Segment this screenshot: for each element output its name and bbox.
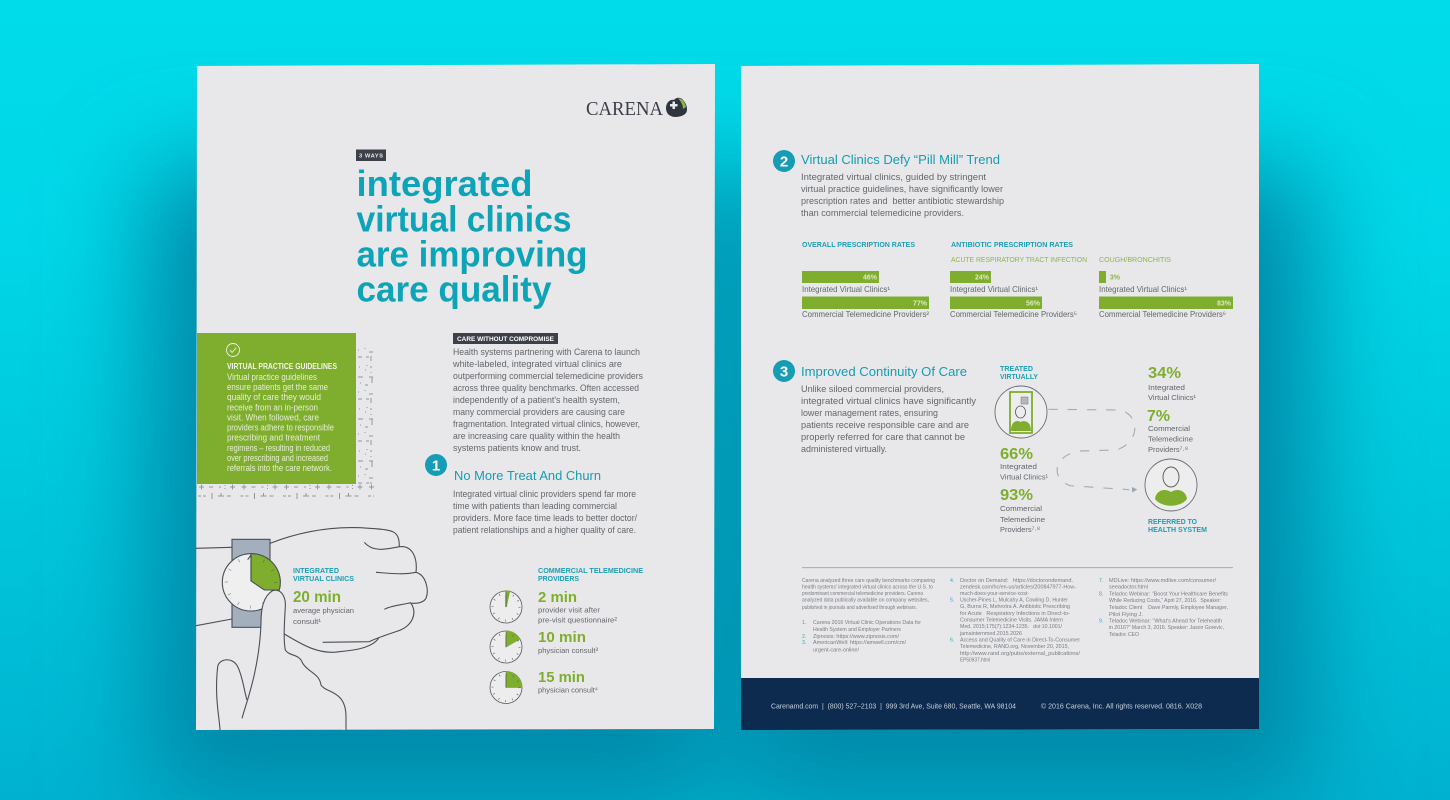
label: integrated virtual clinics xyxy=(293,568,354,583)
section 3 text: lower management rates, ensuring xyxy=(801,408,938,418)
illustration: hand with wristwatch xyxy=(196,528,427,730)
heading: continuity of care: Improved Continuity Of Care xyxy=(801,364,967,379)
section 3 text xyxy=(801,384,976,454)
section 1 text xyxy=(453,489,637,535)
heading: pill mill: Virtual Clinics Defy “Pill Mill” Trend xyxy=(801,152,1000,167)
chart heading: overall: OVERALL PRESCRIPTION RATES xyxy=(802,242,915,249)
section 1 text: time with patients than leading commercial xyxy=(453,501,617,511)
footnotes column 1: predominant commercial telemedicine providers. Carena xyxy=(802,591,923,597)
tag: care without compromise: CARE WITHOUT COMPROMISE xyxy=(457,336,555,343)
tag: 3 ways: 3 WAYS xyxy=(359,154,383,160)
footer copyright text: © 2016 Carena, Inc. All rights reserved. 0816. X028 xyxy=(1041,702,1202,710)
intro text: white-labeled, integrated virtual clinics are xyxy=(452,359,622,369)
footnotes column 2: Doctor on Demand: https://doctorondemand. xyxy=(960,578,1073,584)
section 2 text: than commercial telemedicine providers. xyxy=(801,208,964,218)
label: referred to health system: HEALTH SYSTEM xyxy=(1148,527,1207,534)
bar chart: acute respiratory tract infection: Integrated Virtual Clinics¹ xyxy=(950,284,1038,294)
number badge 1 xyxy=(425,454,447,476)
number badge 3: 3 xyxy=(780,364,788,380)
stat: 7 percent: Commercial xyxy=(1148,424,1190,433)
bar chart: acute respiratory tract infection: 56% xyxy=(1026,300,1041,308)
bar chart: acute respiratory tract infection: 24% xyxy=(975,274,990,282)
stat: 34 percent: Integrated xyxy=(1148,383,1185,392)
stat: 2 min: 2 min xyxy=(538,589,577,606)
footnotes column 1: Zipnosis: https://www.zipnosis.com/ xyxy=(813,634,900,640)
footnotes column 1: urgent-care-online/ xyxy=(813,648,860,654)
callout text: receive from an in-person xyxy=(227,402,318,412)
label: commercial telemedicine providers: PROVIDERS xyxy=(538,576,579,583)
icon: clock 10 min xyxy=(490,631,522,663)
stat: 10 min xyxy=(538,629,598,655)
label: treated virtually: TREATED xyxy=(1000,366,1033,373)
label: treated virtually: VIRTUALLY xyxy=(1000,374,1038,381)
footnotes column 3: While Reducing Costs,” April 27, 2016. Speaker: xyxy=(1109,598,1221,604)
callout text: prescribing and treatment xyxy=(227,433,320,443)
stat: 2 min: provider visit after xyxy=(538,606,600,614)
footnotes column 2: Consumer Telemedicine Visits. JAMA Intern xyxy=(960,618,1063,624)
footnotes column 3: MDLive: https://www.mdlive.com/consumer/ xyxy=(1109,578,1217,584)
stat: 66 percent: Virtual Clinics¹ xyxy=(1000,472,1048,482)
stat: 34 percent: Virtual Clinics¹ xyxy=(1148,393,1196,402)
footer contact text: Carenamd.com | (800) 527–2103 | 999 3rd Ave, Suite 680, Seattle, WA 98104 xyxy=(771,702,1016,710)
label: referred to health system: REFERRED TO xyxy=(1148,519,1198,526)
footnotes column 2: Telemedicine, RAND.org, November 20, 2015, xyxy=(960,644,1069,650)
intro text: fragmentation. Integrated virtual clinics, however, xyxy=(453,419,640,429)
footnotes column 2: for Acute Respiratory Infections in Direct-to- xyxy=(960,611,1070,617)
stat: 93 percent: Telemedicine xyxy=(1000,515,1045,524)
footnotes column 2: 5. xyxy=(950,598,954,604)
stat: 10 min: physician consult³ xyxy=(538,646,598,655)
section 1 text: Integrated virtual clinic providers spend far more xyxy=(453,489,636,499)
stat: 7 percent: Telemedicine xyxy=(1148,434,1193,444)
section 2 text: prescription rates and better antibiotic stewardship xyxy=(801,196,1004,206)
section 2 text: virtual practice guidelines, have significantly lower xyxy=(801,184,1003,194)
panel: left page xyxy=(196,64,715,730)
label: commercial telemedicine providers: COMMERCIAL TELEMEDICINE xyxy=(538,568,643,575)
callout text: referrals into the care network. xyxy=(227,463,332,473)
bar chart: cough and bronchitis: 83% xyxy=(1217,300,1232,308)
footnotes column 2: jamainternmed.2015.2026 xyxy=(959,631,1022,637)
callout text: ensure patients get the same xyxy=(227,382,328,392)
bar chart: overall prescription rates xyxy=(802,271,929,319)
footer bar xyxy=(741,678,1259,730)
footnotes column 1 xyxy=(802,578,935,654)
footnotes column 3: in 2016?” March 3, 2016. Speaker: Jason Gorevic, xyxy=(1109,625,1224,631)
footnotes column 2 xyxy=(950,578,1081,664)
stat: 20 min: 20 min xyxy=(293,589,341,606)
callout: virtual practice guidelines xyxy=(197,333,356,484)
title: virtual clinics xyxy=(356,198,572,240)
label: referred to health system xyxy=(1148,519,1207,534)
panel: right page xyxy=(741,64,1259,730)
callout text: providers adhere to responsible xyxy=(227,423,334,433)
intro text: systems patients know and trust. xyxy=(453,443,581,453)
stat: 34 percent: 34% xyxy=(1148,365,1181,382)
stat: 66 percent xyxy=(1000,446,1048,482)
bar chart: cough and bronchitis: Commercial Telemedicine Providers⁶ xyxy=(1099,309,1226,319)
stat: 15 min: physician consult⁴ xyxy=(538,686,598,694)
footnotes column 3: Teladoc Webinar: “What's Ahead for Telehealth xyxy=(1109,619,1222,625)
title: are improving xyxy=(356,234,588,274)
stat: 20 min xyxy=(293,589,354,626)
intro text: outperforming commercial telemedicine providers xyxy=(453,371,643,381)
bar chart: cough and bronchitis xyxy=(1099,271,1233,319)
icon: phone with doctor xyxy=(995,386,1047,438)
intro text: many commercial providers are causing care xyxy=(453,407,625,417)
icon: check circle xyxy=(226,344,240,356)
callout heading: VIRTUAL PRACTICE GUIDELINES xyxy=(227,362,337,371)
footnotes column 2: EP50937.html xyxy=(960,658,990,664)
footnotes column 3: Teladoc Client Dave Parmly, Employee Manager, xyxy=(1109,605,1228,611)
footnotes column 3: Teladoc CEO xyxy=(1109,632,1139,638)
bar chart: cough and bronchitis: Integrated Virtual Clinics¹ xyxy=(1099,284,1187,294)
stat: 15 min: 15 min xyxy=(538,669,585,686)
section 2 text: Integrated virtual clinics, guided by stringent xyxy=(801,172,986,182)
footnotes column 2: http://www.rand.org/pubs/external_publications/ xyxy=(960,651,1081,657)
stat: 66 percent: Integrated xyxy=(1000,462,1037,471)
number badge 1: 1 xyxy=(432,458,440,474)
bar chart: overall prescription rates: 77% xyxy=(913,300,928,308)
icon: doctor in circle xyxy=(1145,459,1197,511)
callout text: visit. When followed, care xyxy=(227,412,319,422)
footnotes column 1: 1. xyxy=(802,620,806,626)
bar chart: overall prescription rates: 46% xyxy=(863,274,878,282)
footnotes column 2: zendesk.com/hc/en-us/articles/200847977-How- xyxy=(960,584,1076,590)
footnotes column 3: Pilot Flying J. xyxy=(1109,612,1143,618)
icon: clock 15 min xyxy=(490,672,522,704)
footnotes column 1: health systems' integrated virtual clinics across the U.S. to xyxy=(802,584,933,590)
stat: 93 percent: 93% xyxy=(1000,487,1033,504)
icon: clock 2 min xyxy=(490,591,522,623)
section 3 text: patients receive responsible care and are xyxy=(801,420,969,430)
footnotes column 1: Carena 2016 Virtual Clinic Operations Data for xyxy=(813,620,921,626)
label: treated virtually xyxy=(1000,366,1038,381)
intro text: independently of a patient's health system, xyxy=(453,395,620,405)
footnotes column 3: 8. xyxy=(1099,592,1103,598)
stat: 66 percent: 66% xyxy=(1000,446,1033,463)
callout text: quality of care they would xyxy=(227,392,321,402)
decorative dot pattern xyxy=(197,345,374,500)
chart subheading: cough: COUGH/BRONCHITIS xyxy=(1099,257,1171,264)
bar chart: overall prescription rates: Integrated Virtual Clinics¹ xyxy=(802,284,890,294)
footnotes column 3 xyxy=(1099,578,1228,638)
arrow: dashed path to health system xyxy=(1048,409,1137,492)
footnotes column 2: Access and Quality of Care in Direct-To-Consumer xyxy=(960,638,1080,644)
intro text: are increasing care quality within the health xyxy=(453,431,620,441)
stat: 7 percent xyxy=(1147,408,1193,454)
footnotes column 3: Teladoc Webinar: “Boost Your Healthcare Benefits xyxy=(1109,592,1228,598)
footnotes column 2: 6. xyxy=(950,638,954,644)
heading: no more treat and churn: No More Treat And Churn xyxy=(454,468,601,483)
stat: 93 percent xyxy=(1000,487,1045,534)
footnotes column 1: 3. xyxy=(802,640,806,646)
callout text: over prescribing and increased xyxy=(227,453,328,463)
page shadows xyxy=(150,170,1310,800)
footnotes column 1: analyzed data publically available on company websites, xyxy=(802,598,929,604)
footnotes column 2: 4. xyxy=(950,578,954,584)
stat: 7 percent: Providers⁷·⁸ xyxy=(1148,445,1188,454)
footnotes column 1: Health System and Employer Partners xyxy=(813,627,901,633)
intro text: across three quality benchmarks. Often accessed xyxy=(453,383,639,393)
callout text: Virtual practice guidelines xyxy=(227,372,317,382)
footnotes column 1: AmericanWell: https://amwell.com/cm/ xyxy=(813,640,907,646)
label: commercial telemedicine providers xyxy=(538,568,643,583)
footnotes column 1: Carena analyzed three care quality benchmarks comparing xyxy=(802,578,935,584)
stat: 2 min xyxy=(538,589,617,624)
footnotes column 2: Uscher-Pines L, Mulcahy A, Cowling D, Hunter xyxy=(960,598,1068,604)
label: integrated virtual clinics: VIRTUAL CLINICS xyxy=(293,576,354,583)
number badge 3 xyxy=(773,360,795,382)
section 3 text: Unlike siloed commercial providers, xyxy=(801,384,944,394)
intro text: Health systems partnering with Carena to launch xyxy=(453,347,640,357)
tag: 3 ways xyxy=(356,150,386,161)
stat: 34 percent xyxy=(1148,365,1196,402)
footnotes column 2: much-does-your-service-cost- xyxy=(960,591,1029,597)
section 3 text: administered virtually. xyxy=(801,444,887,454)
logo: Carena: CARENA xyxy=(586,98,663,120)
footnotes column 3: 7. xyxy=(1099,578,1103,584)
stat: 10 min: 10 min xyxy=(538,629,586,646)
chart subheading: acute respiratory: ACUTE RESPIRATORY TRACT INFECTION xyxy=(951,257,1087,264)
title: integrated xyxy=(356,163,532,204)
title: care quality xyxy=(356,268,552,310)
section 1 text: patient relationships and a higher quality of care. xyxy=(453,525,636,535)
stat: 7 percent: 7% xyxy=(1147,408,1170,425)
section 3 text: properly referred for care that cannot be xyxy=(801,432,965,442)
bar chart: acute respiratory tract infection xyxy=(950,271,1077,319)
section 3 text: integrated virtual clinics have significantly xyxy=(801,396,976,406)
stat: 93 percent: Providers⁷·⁸ xyxy=(1000,525,1040,534)
section 2 text xyxy=(801,172,1004,218)
stat: 20 min: consult¹ xyxy=(293,617,321,626)
footnotes column 3: seeadoctor.html xyxy=(1109,585,1148,591)
label: integrated virtual clinics: INTEGRATED xyxy=(293,568,339,575)
number badge 2: 2 xyxy=(780,154,788,170)
stat: 15 min xyxy=(538,669,598,694)
stat: 2 min: pre-visit questionnaire² xyxy=(538,616,617,624)
bar chart: acute respiratory tract infection: Commercial Telemedicine Providers⁵ xyxy=(950,309,1077,319)
number badge 2 xyxy=(773,150,795,172)
callout text xyxy=(227,372,334,473)
bar chart: overall prescription rates: Commercial Telemedicine Providers² xyxy=(802,309,929,319)
footnotes column 1: published in journals and advertised through webinars. xyxy=(802,605,917,611)
tag: care without compromise xyxy=(453,333,558,344)
stat: 20 min: average physician xyxy=(293,606,354,615)
footnotes column 2: G, Burns R, Mehrotra A. Antibiotic Prescribing xyxy=(960,604,1070,610)
intro text xyxy=(452,347,643,453)
stat: 93 percent: Commercial xyxy=(1000,504,1042,513)
footnotes column 3: 9. xyxy=(1099,619,1103,625)
footnotes column 2: Med. 2015;175(7):1234-1235. doi:10.1001/ xyxy=(960,624,1063,630)
callout text: regimens – resulting in reduced xyxy=(227,443,330,453)
footnotes column 1: 2. xyxy=(802,634,806,640)
title xyxy=(356,163,588,310)
chart heading: antibiotic: ANTIBIOTIC PRESCRIPTION RATES xyxy=(951,242,1073,249)
bar chart: cough and bronchitis: 3% xyxy=(1110,274,1121,282)
section 1 text: providers. More face time leads to better doctor/ xyxy=(453,513,637,523)
